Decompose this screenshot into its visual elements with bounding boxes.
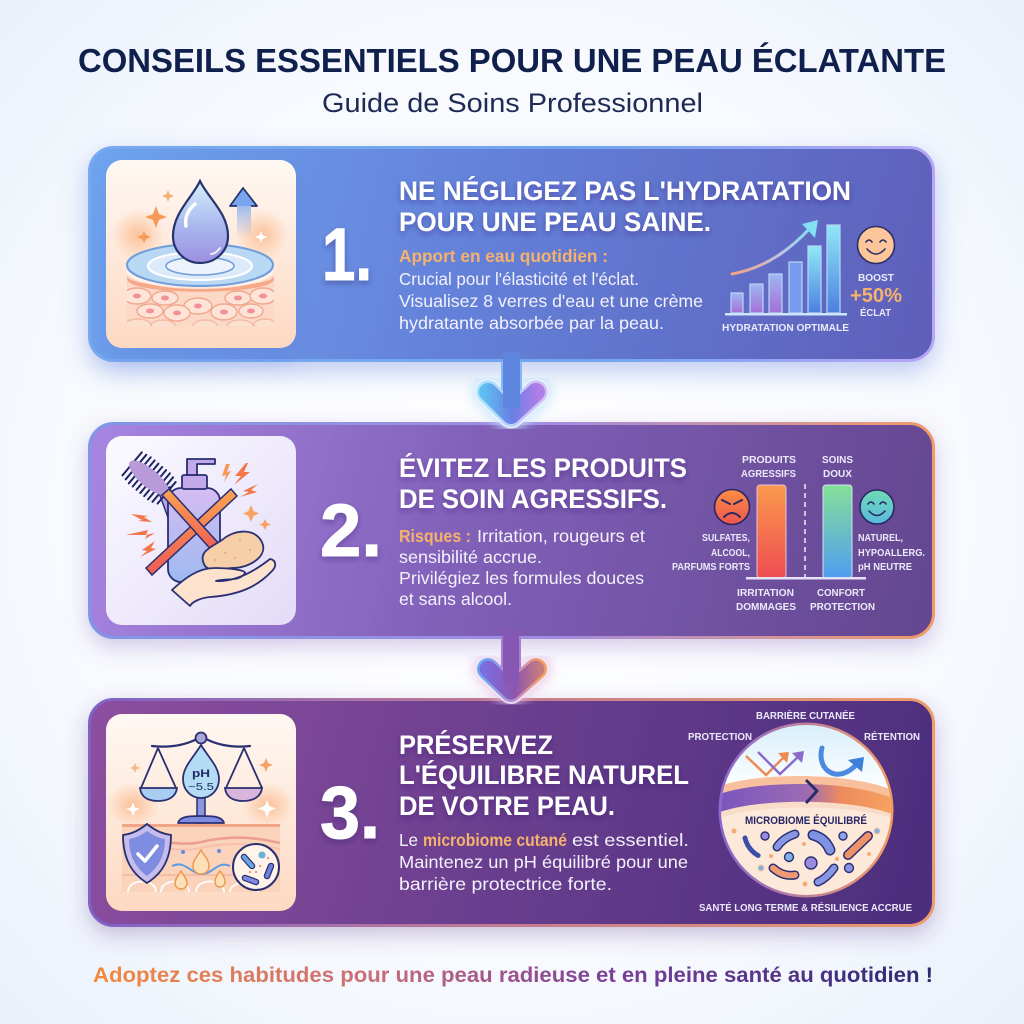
comparison chart: agressifs vs doux: PROTECTION: [810, 601, 875, 613]
comparison chart: agressifs vs doux: NATUREL,: [858, 532, 903, 544]
heading 3: [399, 729, 689, 821]
closing message: Adoptez ces habitudes pour une peau radieuse et en pleine santé au quotidien !: [93, 964, 933, 987]
heading 3: L'ÉQUILIBRE NATUREL: [399, 759, 689, 790]
step number 1: 1.: [322, 213, 372, 296]
smiley and boost stat: BOOST: [858, 272, 895, 284]
icon tile: crossed-out harsh products: [106, 436, 296, 625]
heading 2: ÉVITEZ LES PRODUITS: [399, 452, 687, 483]
body text 2: Privilégiez les formules douces: [399, 568, 644, 588]
icon tile: pH balance and skin barrier: ~5.5: [188, 782, 215, 793]
diagram: skin barrier and microbiome: RÉTENTION: [864, 730, 920, 743]
heading 1: [399, 175, 851, 237]
bar chart: hydratation optimale: [722, 220, 849, 334]
heading 3: PRÉSERVEZ: [399, 729, 553, 760]
heading 3: DE VOTRE PEAU.: [399, 791, 615, 821]
heading 2: [399, 452, 687, 514]
body text 2: sensibilité accrue.: [399, 547, 542, 567]
body text 3: microbiome cutané: [423, 830, 567, 850]
comparison chart: agressifs vs doux: pH NEUTRE: [858, 561, 912, 573]
body text 3: barrière protectrice forte.: [399, 874, 612, 894]
arrow 2 to 3: [488, 630, 536, 691]
panel 3 background: [90, 700, 934, 926]
heading 1: NE NÉGLIGEZ PAS L'HYDRATATION: [399, 175, 851, 206]
comparison chart: agressifs vs doux: DOUX: [823, 468, 852, 480]
comparison chart: agressifs vs doux: HYPOALLERG.: [858, 547, 925, 559]
microbes: [732, 828, 880, 886]
body text 2: et sans alcool.: [399, 589, 512, 609]
body text 3: [399, 830, 689, 894]
comparison chart: agressifs vs doux: AGRESSIFS: [741, 468, 796, 480]
comparison chart: agressifs vs doux: DOMMAGES: [736, 601, 796, 613]
smiley and boost stat: +50%: [850, 285, 902, 307]
heading 1: POUR UNE PEAU SAINE.: [399, 207, 711, 237]
body text 2: Irritation, rougeurs et: [477, 526, 645, 546]
comparison chart: agressifs vs doux: IRRITATION: [737, 587, 794, 599]
body text 1: Crucial pour l'élasticité et l'éclat.: [399, 269, 639, 289]
comparison chart: agressifs vs doux: SULFATES,: [702, 532, 750, 544]
body text 1: [399, 246, 703, 333]
diagram: skin barrier and microbiome: [688, 709, 920, 914]
panel 1 background: [90, 148, 934, 360]
comparison chart: agressifs vs doux: ALCOOL,: [711, 547, 750, 559]
title: CONSEILS ESSENTIELS POUR UNE PEAU ÉCLATANTE: [78, 42, 946, 79]
icon tile: pH balance and skin barrier: pH: [192, 768, 210, 780]
diagram: skin barrier and microbiome: BARRIÈRE CUTANÉE: [756, 709, 855, 722]
arrow 1 to 2: [488, 352, 536, 415]
body text 1: hydratante absorbée par la peau.: [399, 313, 664, 333]
body text 2: Risques :: [399, 526, 471, 546]
body text 2: [399, 526, 645, 609]
body text 1: Visualisez 8 verres d'eau et une crème: [399, 291, 703, 311]
icon tile: pH balance and skin barrier: [106, 714, 296, 911]
comparison chart: agressifs vs doux: [672, 454, 925, 613]
diagram: skin barrier and microbiome: MICROBIOME ÉQUILIBRÉ: [745, 814, 867, 827]
panel 1: hydratation: [90, 148, 934, 360]
diagram: skin barrier and microbiome: PROTECTION: [688, 731, 752, 743]
icon tile: water drop on skin: [106, 160, 296, 348]
comparison chart: agressifs vs doux: CONFORT: [817, 587, 866, 599]
step number 2: 2.: [320, 489, 382, 572]
comparison chart: agressifs vs doux: SOINS: [822, 454, 853, 466]
step number 3: 3.: [320, 771, 380, 854]
body text 3: Maintenez un pH équilibré pour une: [399, 852, 688, 872]
smiley and boost stat: [850, 226, 902, 319]
comparison chart: agressifs vs doux: PARFUMS FORTS: [672, 561, 750, 573]
body text 3: est essentiel.: [572, 830, 689, 850]
body text 3: Le: [399, 830, 418, 850]
bar chart: hydratation optimale: HYDRATATION OPTIMALE: [722, 322, 849, 334]
heading 2: DE SOIN AGRESSIFS.: [399, 484, 667, 514]
comparison chart: agressifs vs doux: PRODUITS: [742, 454, 796, 466]
panel 3: équilibre naturel: [90, 700, 934, 926]
panel 2: produits agressifs: [90, 424, 934, 638]
panel 2 background: [90, 424, 934, 638]
smiley and boost stat: ÉCLAT: [860, 306, 892, 319]
subtitle: Guide de Soins Professionnel: [322, 88, 703, 118]
body text 1: Apport en eau quotidien :: [399, 246, 608, 266]
diagram: skin barrier and microbiome: SANTÉ LONG TERME & RÉSILIENCE ACCRUE: [699, 901, 912, 914]
